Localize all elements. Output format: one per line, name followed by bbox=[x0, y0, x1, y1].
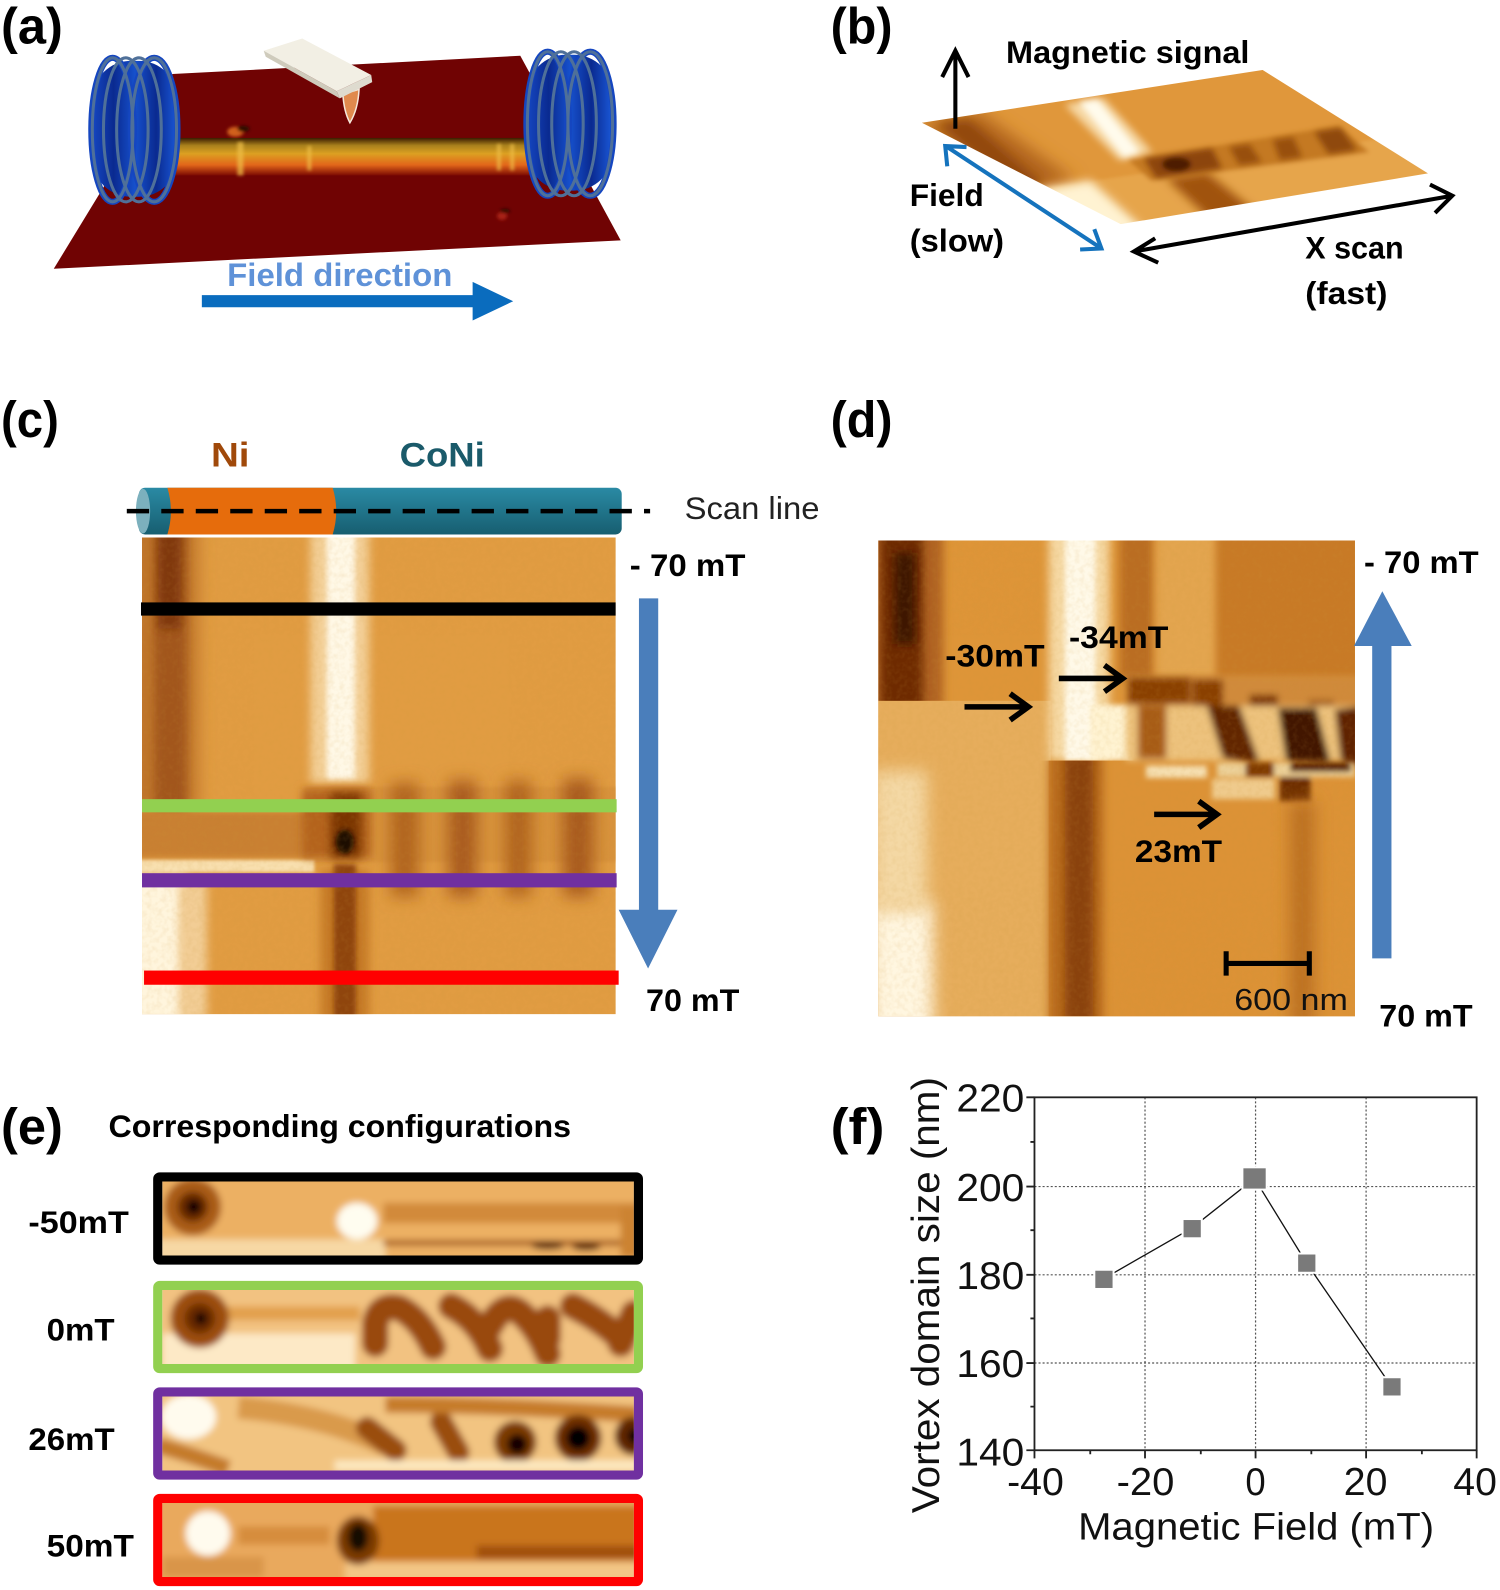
MFM image c bbox=[142, 538, 616, 1014]
y axis tick labels: 180 bbox=[956, 1255, 1024, 1298]
field direction label: Field direction bbox=[227, 257, 452, 293]
panel a: experimental setup bbox=[1, 0, 621, 320]
nanowire cylinder bbox=[136, 488, 622, 534]
text: 70 mT: 70 mT bbox=[1379, 998, 1473, 1033]
annotation: -34mT: -34mT bbox=[1069, 620, 1168, 655]
x axis tick labels: 40 bbox=[1453, 1461, 1497, 1504]
field labels: 26mT bbox=[28, 1422, 115, 1457]
nanowire band bbox=[174, 138, 531, 175]
y axis tick labels: 200 bbox=[956, 1167, 1024, 1210]
config image 50mT bbox=[162, 1503, 634, 1577]
arrow at -30mT bbox=[964, 694, 1028, 720]
field labels bbox=[28, 1205, 134, 1564]
x axis tick labels: 20 bbox=[1344, 1461, 1387, 1504]
y axis tick labels: 140 bbox=[956, 1431, 1024, 1474]
x axis title: Magnetic Field (mT) bbox=[1078, 1505, 1434, 1547]
label (f): (f) bbox=[831, 1098, 884, 1155]
x axis tick labels bbox=[1007, 1461, 1497, 1504]
plot frame and ticks bbox=[1026, 1097, 1477, 1458]
data markers bbox=[1094, 1167, 1402, 1396]
annotation: 23mT: 23mT bbox=[1135, 834, 1222, 869]
green scan marker bbox=[142, 799, 617, 812]
purple scan marker bbox=[142, 873, 617, 887]
text: field slow: (slow) bbox=[910, 224, 1004, 259]
text: X scan fast: (fast) bbox=[1305, 276, 1387, 311]
grid lines bbox=[1034, 1097, 1477, 1450]
band stripes bbox=[237, 142, 514, 175]
data line bbox=[1103, 1178, 1391, 1386]
3D scan image bbox=[922, 70, 1428, 224]
x axis tick labels: 0 bbox=[1245, 1461, 1266, 1504]
label (d): (d) bbox=[831, 391, 892, 448]
sample plane bbox=[54, 56, 621, 269]
scan line label: Scan line bbox=[685, 491, 819, 526]
y axis tick labels: 160 bbox=[956, 1343, 1024, 1386]
surface defects bbox=[227, 126, 510, 220]
CoNi label: CoNi bbox=[400, 437, 485, 475]
field slow double arrow bbox=[945, 146, 1101, 249]
field labels: -50mT bbox=[28, 1205, 129, 1240]
frame 26mT bbox=[158, 1392, 638, 1475]
cantilever and tip bbox=[264, 39, 372, 123]
field direction arrow bbox=[202, 282, 513, 320]
text: X scan fast: X scan bbox=[1305, 231, 1404, 266]
config image 0mT bbox=[162, 1290, 634, 1364]
frame 0mT bbox=[158, 1285, 638, 1369]
right coil bbox=[526, 52, 614, 196]
x axis tick labels: -20 bbox=[1117, 1461, 1174, 1504]
text: field slow: Field bbox=[910, 178, 984, 213]
magnetic signal arrow bbox=[942, 51, 969, 129]
x axis tick labels: -40 bbox=[1007, 1461, 1064, 1504]
panel b: scan schematic bbox=[831, 0, 1452, 311]
frame -50mT bbox=[158, 1177, 638, 1260]
text: 70 mT: 70 mT bbox=[646, 983, 739, 1018]
red scan marker bbox=[144, 971, 619, 985]
annotation: -30mT: -30mT bbox=[945, 638, 1045, 673]
arrow at 23mT bbox=[1154, 801, 1217, 828]
panel c: field sweep down bbox=[1, 391, 819, 1024]
Ni label: Ni bbox=[211, 437, 250, 475]
panel f: vortex domain size chart bbox=[831, 1077, 1497, 1547]
sweep arrow up bbox=[1354, 591, 1412, 958]
field labels: 0mT bbox=[47, 1313, 115, 1348]
X scan double arrow bbox=[1134, 185, 1452, 263]
scale bar label: 600 nm bbox=[1234, 983, 1348, 1017]
text: -70 mT: - 70 mT bbox=[630, 548, 745, 583]
black scan marker bbox=[141, 602, 616, 616]
arrow at -34mT bbox=[1059, 665, 1123, 692]
scale bar bbox=[1226, 951, 1309, 976]
field labels: 50mT bbox=[47, 1529, 134, 1564]
y axis title: Vortex domain size (nm) bbox=[905, 1077, 948, 1513]
config image -50mT bbox=[162, 1182, 634, 1256]
heading: Corresponding configurations bbox=[109, 1109, 571, 1144]
text: -70 mT: - 70 mT bbox=[1364, 545, 1479, 580]
panel d: field sweep up bbox=[831, 391, 1479, 1034]
y axis tick labels bbox=[956, 1078, 1024, 1474]
panel e: corresponding configurations bbox=[1, 1098, 664, 1590]
frame 50mT bbox=[158, 1498, 638, 1582]
label (e): (e) bbox=[1, 1098, 63, 1155]
left coil bbox=[91, 58, 178, 202]
config image 26mT bbox=[162, 1396, 634, 1470]
text: magnetic signal: Magnetic signal bbox=[1006, 35, 1249, 70]
MFM image d bbox=[878, 540, 1355, 1016]
y axis tick labels: 220 bbox=[956, 1078, 1024, 1121]
label (c): (c) bbox=[1, 391, 59, 448]
sweep arrow down bbox=[619, 598, 677, 969]
scan line bbox=[127, 509, 650, 513]
